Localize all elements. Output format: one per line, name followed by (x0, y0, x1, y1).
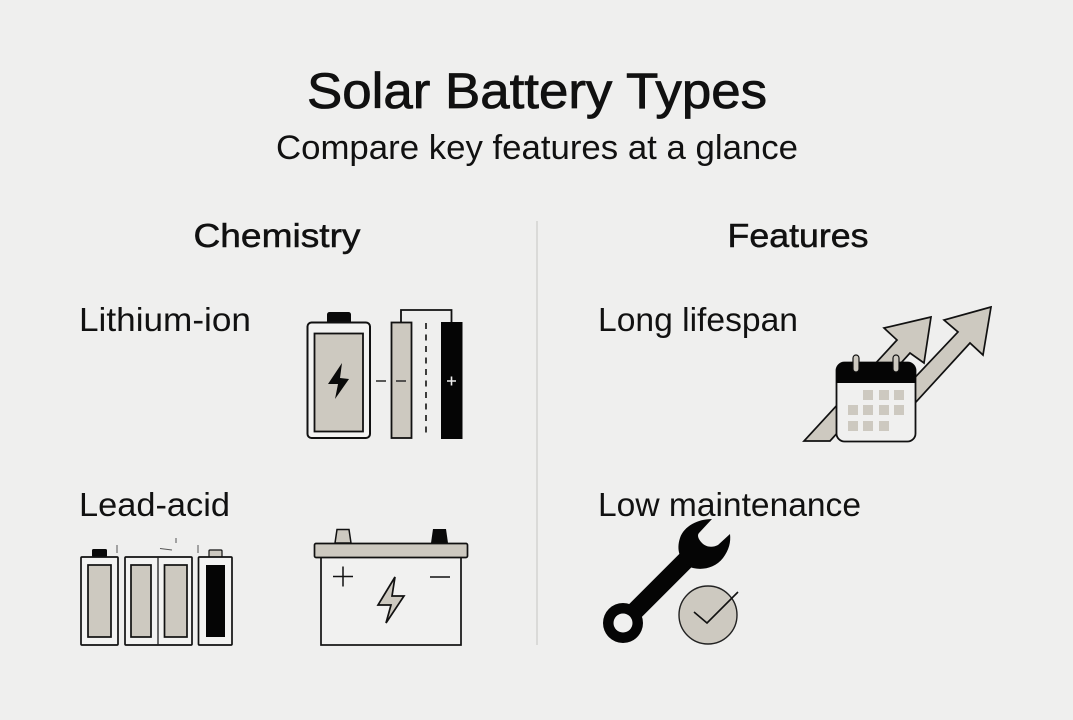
right arrow (905, 307, 991, 414)
title: Solar Battery Types (307, 63, 767, 119)
label: Long lifespan: Long lifespan (598, 301, 798, 338)
icon: car battery (314, 529, 468, 645)
icon: lead-acid cell row (81, 538, 232, 645)
heading: Chemistry: Chemistry (194, 217, 361, 254)
icon: lithium-ion electrode diagram (376, 310, 462, 439)
icon: upward arrows with calendar (804, 307, 991, 442)
icon: lithium-ion battery cell (308, 312, 370, 438)
left arrow (804, 317, 931, 441)
heading: Features: Features (728, 217, 868, 254)
icon: wrench and check (603, 519, 738, 644)
subtitle: Compare key features at a glance (276, 129, 798, 167)
wrench (603, 519, 730, 643)
check badge (679, 586, 738, 644)
label: Low maintenance: Low maintenance (598, 486, 861, 523)
label: Lithium-ion: Lithium-ion (79, 301, 251, 338)
label: Lead-acid: Lead-acid (79, 486, 230, 523)
calendar (836, 355, 916, 442)
